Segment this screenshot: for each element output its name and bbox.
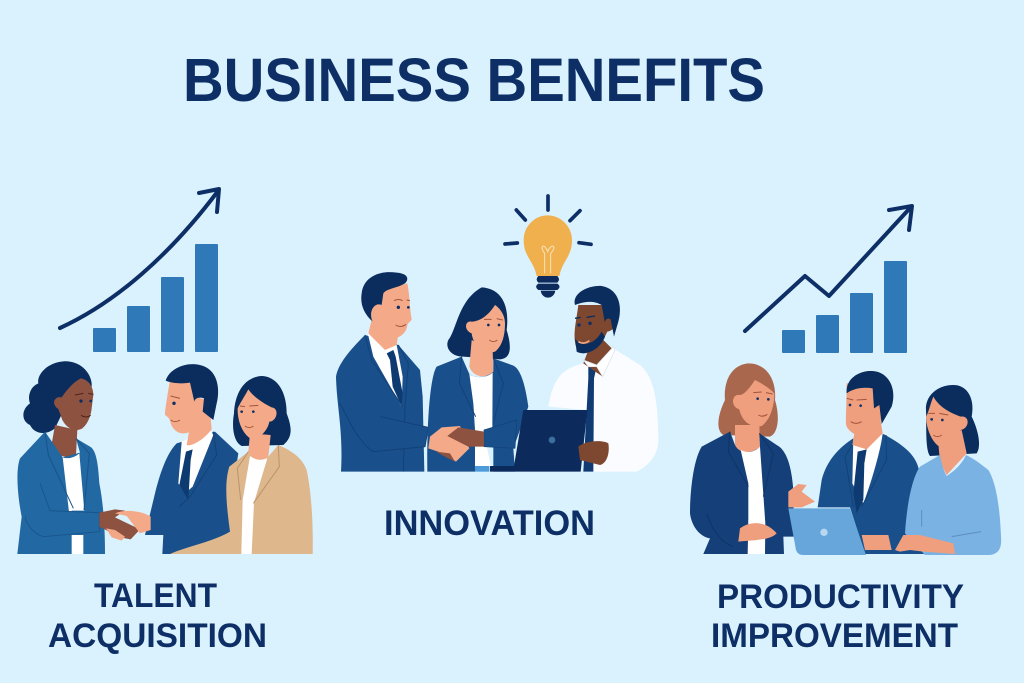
- panel: productivity improvement: [690, 206, 1001, 655]
- arrow: rising trend: [60, 189, 219, 328]
- icon: laptop: [490, 410, 587, 472]
- illustration: handshake team: [17, 361, 313, 554]
- person: man in white shirt: [548, 286, 658, 472]
- label: productivity improvement: IMPROVEMENT: [711, 617, 958, 655]
- icon: light bulb: [505, 196, 591, 298]
- person: woman in navy jacket: [690, 363, 815, 554]
- arrow: rising trend: [745, 206, 912, 331]
- title: BUSINESS BENEFITS: [183, 46, 765, 114]
- person: woman in tan jacket: [170, 376, 313, 554]
- bar chart: growth: [782, 261, 907, 353]
- illustration: productivity team: [690, 363, 1001, 555]
- illustration: innovation team: [336, 272, 658, 472]
- person: woman in blue jacket: [17, 361, 140, 554]
- person: woman in blue jacket: [427, 287, 528, 472]
- label: productivity improvement: PRODUCTIVITY: [717, 578, 964, 616]
- label: talent acquisition: TALENT: [94, 577, 217, 615]
- icon: laptop: [788, 508, 892, 555]
- hands: handshake: [428, 426, 609, 465]
- person: man in suit: [818, 371, 925, 554]
- person: woman in light blue sweater: [895, 385, 1001, 555]
- person: man in suit: [336, 272, 428, 472]
- person: man in suit: [115, 364, 238, 554]
- panel: talent acquisition: [17, 189, 313, 655]
- panel: innovation: [336, 196, 658, 543]
- label: productivity improvement: [711, 578, 964, 655]
- label: talent acquisition: ACQUISITION: [48, 617, 267, 655]
- label: talent acquisition: [48, 577, 267, 655]
- bar chart: growth: [93, 244, 218, 352]
- label: innovation: INNOVATION: [384, 504, 595, 543]
